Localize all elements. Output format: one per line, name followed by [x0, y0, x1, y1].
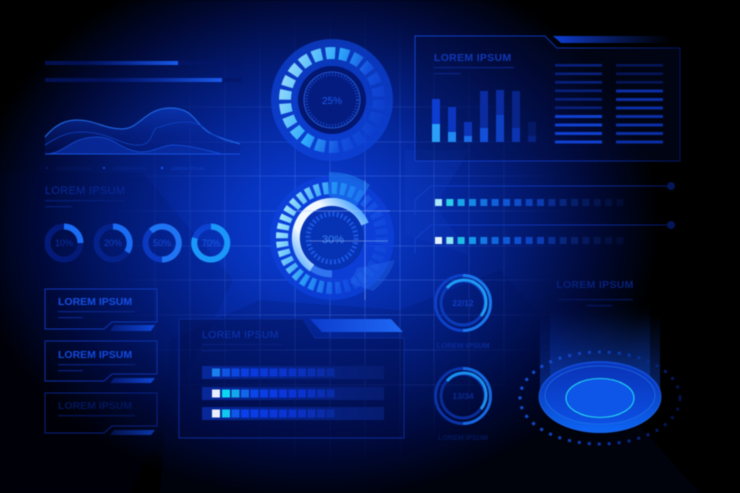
panel heading: LOREM IPSUM: [202, 329, 279, 341]
donut 70%: 70%: [202, 238, 220, 248]
progress bars top left: [45, 61, 242, 82]
info box 2: LOREM IPSUM: [58, 349, 132, 361]
chart legend: LOREM IPSUM: [113, 166, 147, 172]
meter 1: [202, 366, 384, 379]
ring gauge 13/34: [436, 368, 490, 424]
gauge 30%: [270, 172, 395, 300]
chart legend: [46, 166, 205, 172]
ring gauge 22/12: [436, 276, 490, 330]
chart legend: LOREM IPSUM: [171, 166, 205, 172]
info box 3: [45, 393, 157, 435]
ring label 2: LOREM IPSUM: [438, 435, 488, 442]
heading: donut section: LOREM IPSUM: [45, 185, 125, 197]
ring label 1: LOREM IPSUM: [437, 341, 489, 350]
chart legend: LOREM IPSUM: [56, 166, 90, 172]
meter 2: [202, 387, 384, 400]
tab: [310, 319, 403, 332]
heading: donut section: [45, 185, 126, 207]
donut 10%: 10%: [55, 238, 73, 248]
hologram heading: [556, 279, 634, 306]
meter 3: [202, 407, 384, 420]
info box 2: [45, 341, 157, 383]
panel heading: LOREM IPSUM: [434, 52, 511, 64]
gauge 25%: [271, 39, 393, 161]
hologram platform: [520, 305, 680, 444]
bar chart: [432, 90, 536, 142]
top right panel: [415, 36, 680, 161]
square meter row 2: [415, 221, 675, 253]
info box 3: LOREM IPSUM: [58, 400, 132, 412]
donut 70%: [194, 226, 228, 260]
bottom centre panel: [179, 319, 404, 438]
gauge 25%: 25%: [322, 96, 342, 107]
area chart: [45, 108, 240, 154]
info box 1: [45, 289, 157, 331]
square meter row 1: [415, 182, 675, 215]
panel heading: [434, 52, 514, 74]
donut 50%: 50%: [153, 238, 171, 248]
donut charts: [48, 226, 228, 260]
info box 1: LOREM IPSUM: [58, 296, 132, 308]
gauge 30%: 30%: [322, 234, 344, 246]
panel heading: [202, 329, 282, 351]
tab: [553, 36, 672, 43]
line table column 1: [555, 64, 602, 144]
donut 10%: [48, 226, 80, 260]
line table column 2: [616, 64, 663, 144]
hologram heading: LOREM IPSUM: [556, 279, 634, 291]
donut 20%: [96, 226, 130, 260]
donut 20%: 20%: [104, 238, 122, 248]
donut 50%: [146, 226, 179, 260]
ring gauge 13/34: 13/34: [452, 391, 474, 401]
ring gauge 22/12: 22/12: [452, 298, 474, 308]
